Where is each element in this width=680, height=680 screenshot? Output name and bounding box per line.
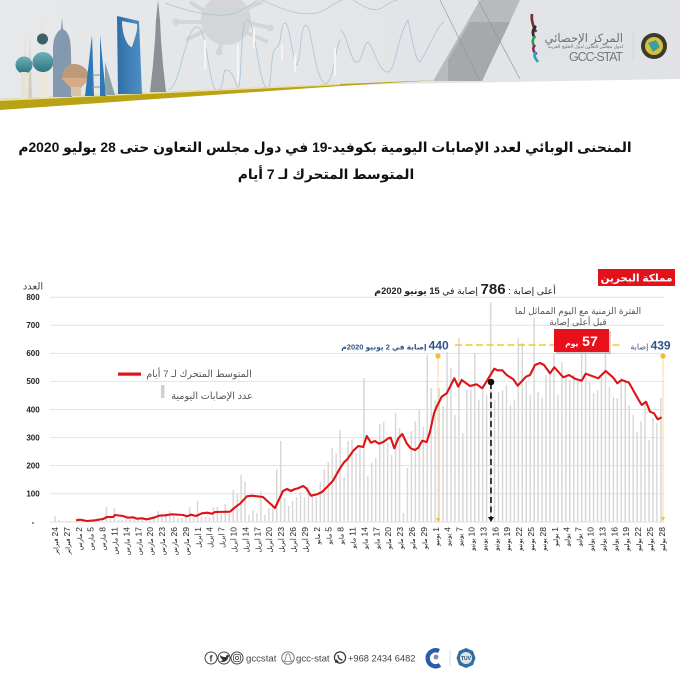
icon: instagram: [231, 652, 243, 664]
callout: 57 days: [554, 329, 611, 354]
icon: gulf landmarks skyline: [16, 0, 166, 99]
y axis labels: [23, 282, 43, 527]
x axis date labels: 1 أبريل: [193, 527, 203, 548]
header banner: [0, 0, 680, 110]
x axis date labels: 2 مارس: [74, 527, 84, 550]
y axis labels: 400: [26, 406, 40, 414]
y axis labels: 700: [26, 321, 40, 330]
x axis date labels: 2 مايو: [312, 527, 322, 545]
virus watermark: [172, 0, 274, 56]
y axis labels: 600: [26, 349, 40, 358]
y axis labels: 100: [26, 490, 40, 498]
icon: TUV badge: TUV: [461, 656, 472, 662]
x axis date labels: 10 يونيو: [466, 527, 476, 552]
x axis date labels: 13 يونيو: [478, 527, 488, 552]
x axis date labels: 20 مايو: [383, 527, 393, 550]
yellow reference lines: [435, 353, 666, 522]
x axis date labels: 17 مايو: [371, 527, 381, 550]
icon: kuwait towers: [16, 16, 54, 99]
x axis date labels: 25 يوليو: [645, 527, 655, 552]
x axis date labels: 28 يوليو: [657, 527, 667, 552]
callout: period note: الفترة الزمنية مع اليوم المماثل لما: [515, 306, 641, 316]
icon: domed building: [61, 64, 90, 96]
x axis date labels: 19 يوليو: [621, 527, 631, 552]
x axis date labels: 20 أبريل: [264, 527, 274, 552]
x axis date labels: 17 مارس: [133, 527, 143, 555]
x axis date labels: 11 مايو: [348, 527, 358, 549]
logo: GCC-STAT: [532, 14, 667, 64]
x axis date labels: 29 مايو: [419, 527, 429, 550]
dashed yellow connector: [455, 344, 620, 346]
x axis date labels: 5 مارس: [86, 527, 96, 550]
x axis date labels: 4 يونيو: [443, 527, 453, 547]
x axis date labels: 23 أبريل: [276, 527, 286, 552]
grid lines: [50, 297, 664, 522]
x axis date labels: 16 يوليو: [609, 527, 619, 552]
x axis date labels: 26 مايو: [407, 527, 417, 550]
y axis labels: 300: [26, 434, 40, 442]
moving average line: [76, 363, 662, 521]
x axis date labels: 7 أبريل: [217, 527, 227, 548]
ribbon shapes: [433, 0, 520, 81]
callout: 440 cases: 440 إصابة في 2 يونيو 2020م: [341, 338, 449, 352]
x axis date labels: [50, 527, 667, 555]
icon: colour ribbon: [532, 14, 538, 62]
gold band: [0, 80, 440, 110]
x axis date labels: 22 يونيو: [514, 527, 524, 552]
callout: 439 cases: 439 إصابة: [630, 338, 671, 352]
x axis date labels: 14 أبريل: [240, 527, 250, 552]
icon: TUV badge: [456, 648, 476, 668]
x axis date labels: 14 مارس: [121, 527, 131, 555]
x axis date labels: 1 يوليو: [550, 527, 560, 547]
callout: highest cases: أعلى إصابة : 786 إصابة في 15 يونيو 2020م: [374, 281, 556, 298]
x axis date labels: 10 أبريل: [228, 527, 238, 552]
badge: country name: [598, 269, 675, 286]
icon: snapchat: [282, 652, 294, 664]
title: المنحنى الوبائي لعدد الإصابات اليومية بكوفيد-19 في دول مجلس التعاون حتى 28 يوليو 2020م: [18, 139, 632, 156]
x axis date labels: 23 مايو: [395, 527, 405, 550]
x axis date labels: 5 مايو: [324, 527, 334, 545]
y axis labels: 500: [26, 377, 40, 386]
x axis date labels: 26 أبريل: [288, 527, 298, 552]
icon: facebook: [205, 652, 217, 664]
x axis date labels: 24 فبراير: [50, 527, 60, 555]
footer: contact row: gccstat: [246, 654, 277, 664]
y axis labels: العدد: [23, 282, 43, 292]
footer: contact row: [205, 648, 476, 668]
x axis date labels: 23 مارس: [157, 527, 167, 555]
icon: gcc emblem: [641, 33, 667, 59]
x axis date labels: 19 يونيو: [502, 527, 512, 552]
icon: burj khalifa: [150, 0, 166, 92]
x axis date labels: 1 يونيو: [431, 527, 441, 547]
logo: GCC-STAT: المركز الإحصائي: [545, 32, 623, 46]
callout: 57 days: 57 يوم: [565, 333, 598, 349]
x axis date labels: 10 يوليو: [586, 527, 596, 552]
x axis date labels: 29 أبريل: [300, 527, 310, 552]
logo: GCC-STAT: لدول مجلس التعاون لدول الخليج العربية: [548, 44, 623, 49]
x axis date labels: 25 يونيو: [526, 527, 536, 552]
bar chart: daily cases with moving average: [23, 282, 667, 555]
icon: twitter: [218, 652, 230, 664]
x axis date labels: 4 أبريل: [205, 527, 215, 548]
icon: tapered tower: [53, 18, 72, 97]
x axis date labels: 14 مايو: [359, 527, 369, 550]
x axis date labels: 27 فبراير: [62, 527, 72, 555]
x axis date labels: 22 يوليو: [633, 527, 643, 552]
x axis date labels: 17 أبريل: [252, 527, 262, 552]
daily case bars: [55, 302, 661, 522]
x axis date labels: 29 مارس: [181, 527, 191, 555]
y axis labels: 200: [26, 462, 40, 470]
y axis labels: -: [32, 518, 35, 527]
title: [18, 139, 632, 183]
x axis date labels: 13 يوليو: [597, 527, 607, 552]
x axis date labels: 16 يونيو: [490, 527, 500, 552]
footer: contact row: +968 2434 6482: [348, 654, 415, 664]
x axis date labels: 4 يوليو: [562, 527, 572, 547]
icon: whatsapp: [334, 652, 346, 663]
legend: المتوسط المتحرك لـ 7 أيام: [146, 367, 252, 380]
y axis labels: 800: [26, 293, 40, 302]
x axis date labels: 28 يونيو: [538, 527, 548, 552]
footer: contact row: gcc-stat: [296, 654, 330, 664]
legend: عدد الإصابات اليومية: [171, 391, 253, 402]
chart line pattern: [168, 20, 444, 90]
badge: country name: مملكة البحرين: [601, 274, 672, 284]
x axis date labels: 8 مارس: [98, 527, 108, 550]
legend: [118, 367, 253, 402]
icon: kingdom tower: [117, 16, 142, 94]
x axis date labels: 20 مارس: [145, 527, 155, 555]
x axis date labels: 7 يونيو: [455, 527, 465, 547]
icon: twin sail towers: [85, 35, 115, 96]
arrow: peak day marker: [488, 379, 494, 522]
x axis date labels: 11 مارس: [110, 527, 120, 554]
x axis date labels: 7 يوليو: [574, 527, 584, 547]
logo: GCC-STAT: GCC-STAT: [569, 50, 623, 64]
icon: quality badge: [428, 650, 440, 666]
x axis date labels: 8 مايو: [336, 527, 346, 545]
callout: period note: [515, 306, 641, 328]
callout: period note: قبل أعلى إصابة: [549, 316, 607, 328]
icon: facebook: f: [210, 654, 214, 664]
x axis date labels: 26 مارس: [169, 527, 179, 555]
title: المتوسط المتحرك لـ 7 أيام: [238, 165, 414, 183]
